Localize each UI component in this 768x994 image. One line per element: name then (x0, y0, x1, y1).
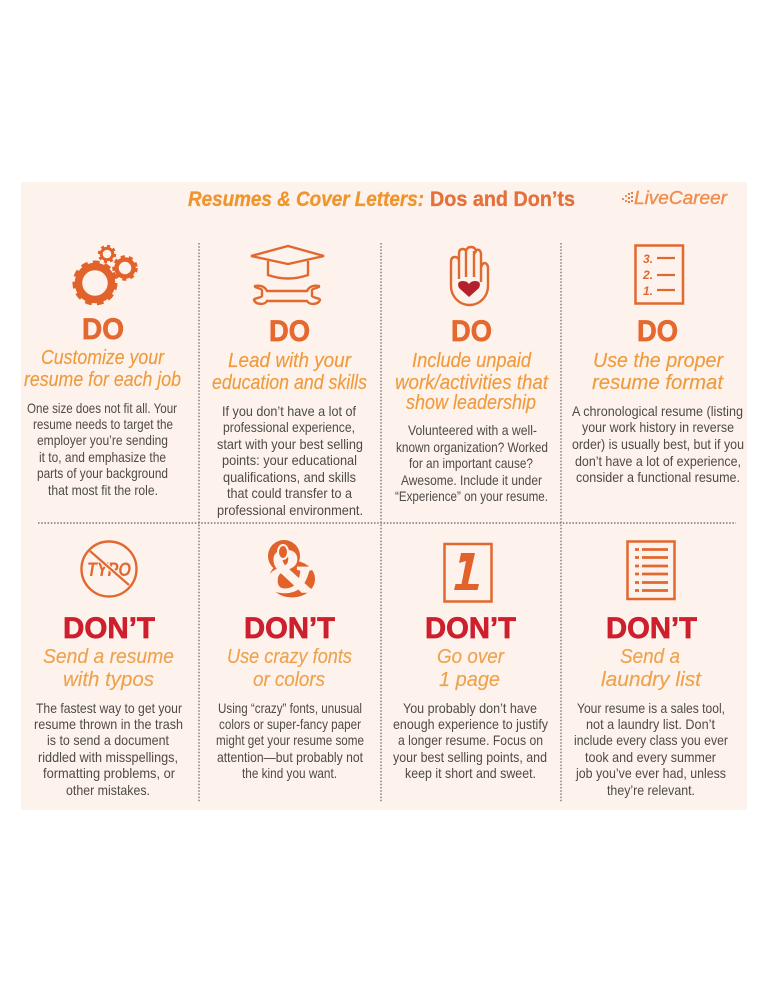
text block: Using “crazy” fonts, unusual (218, 700, 362, 716)
text block: a longer resume. Focus on (398, 732, 543, 748)
icon: numbered list: 2. (642, 268, 653, 282)
text block (34, 700, 183, 798)
text block: The fastest way to get your (36, 700, 182, 716)
text block: attention—but probably not (217, 749, 363, 765)
icon: laundry list (628, 542, 674, 599)
heading: Customize your (41, 347, 165, 369)
text block: You probably don’t have (403, 700, 537, 716)
panel: lead with education (212, 246, 367, 518)
heading: laundry list (601, 669, 702, 691)
panel: background (21, 182, 747, 810)
text block: other mistakes. (66, 782, 150, 798)
icon: numbered list: 1. (643, 284, 653, 298)
heading: education and skills (212, 372, 367, 394)
heading: Go over (437, 646, 505, 668)
text block: resume thrown in the trash (34, 716, 183, 732)
panel: crazy fonts (216, 538, 364, 781)
text block (27, 400, 177, 498)
text block: they’re relevant. (607, 782, 695, 798)
panel: resume format (572, 246, 744, 485)
text block: took and every summer (585, 749, 716, 765)
text block: don’t have a lot of experience, (575, 453, 741, 469)
text block: your work history in reverse (582, 419, 734, 435)
panel: unpaid work (395, 247, 549, 504)
text block: is to send a document (47, 732, 169, 748)
heading (601, 646, 702, 691)
title: Resumes & Cover Letters: (188, 188, 424, 211)
heading: Lead with your (228, 350, 352, 372)
text block: start with your best selling (217, 436, 363, 452)
heading: resume format (592, 372, 724, 394)
heading: show leadership (406, 392, 536, 414)
label: DO: DO (269, 315, 310, 348)
label: DO: DO (637, 315, 678, 348)
panel: customize your resume (24, 246, 181, 498)
heading: with typos (63, 669, 154, 691)
text block (572, 403, 744, 485)
heading: Use crazy fonts (227, 646, 352, 668)
heading (212, 350, 367, 394)
panel: laundry list (574, 542, 728, 798)
text block (574, 700, 728, 798)
text block: If you don’t have a lot of (222, 403, 356, 419)
text block: Volunteered with a well- (408, 422, 537, 438)
heading: resume for each job (24, 369, 181, 391)
text block: Awesome. Include it under (401, 472, 542, 488)
text block: that most fit the role. (48, 482, 158, 498)
icon: numbered list: 3. (643, 252, 653, 266)
text block (395, 422, 548, 504)
heading: Use the proper (593, 350, 724, 372)
text block: that could transfer to a (227, 485, 352, 501)
text block: include every class you ever (574, 732, 728, 748)
icon: graduation cap and wrench (251, 246, 324, 304)
icon: no typos: TYPO (87, 560, 131, 581)
text block: it to, and emphasize the (39, 449, 166, 465)
text block: job you’ve ever had, unless (575, 765, 726, 781)
logo: LiveCareer: LiveCareer (634, 188, 728, 208)
text block: order) is usually best, but if you (572, 436, 744, 452)
text block: resume needs to target the (33, 416, 173, 432)
heading: or colors (253, 669, 325, 691)
heading (592, 350, 724, 394)
label: DO: DO (451, 315, 492, 348)
text block: enough experience to justify (393, 716, 548, 732)
text block: might get your resume some (216, 732, 364, 748)
panel: one page (393, 544, 548, 781)
icon: no typos (82, 542, 136, 596)
text block (217, 403, 363, 518)
label: DON'T: DON’T (63, 612, 155, 645)
heading: work/activities that (395, 372, 549, 394)
text block: “Experience” on your resume. (395, 488, 548, 504)
text block: known organization? Worked (396, 439, 548, 455)
heading (43, 646, 174, 691)
icon: hand with heart (451, 247, 488, 305)
heading (24, 347, 181, 391)
heading: Include unpaid (412, 350, 532, 372)
text block: Your resume is a sales tool, (577, 700, 725, 716)
text block: colors or super-fancy paper (219, 716, 361, 732)
label: DON'T: DON’T (606, 612, 697, 645)
panel: typos (34, 542, 183, 798)
text block (216, 700, 364, 781)
text block: keep it short and sweet. (405, 765, 536, 781)
text block: consider a functional resume. (576, 469, 740, 485)
text block (393, 700, 548, 781)
text block: qualifications, and skills (223, 469, 356, 485)
text block: employer you’re sending (37, 432, 168, 448)
text block: the kind you want. (242, 765, 337, 781)
heading (227, 646, 352, 691)
text block: points: your educational (222, 452, 357, 468)
label: DON'T: DON’T (425, 612, 516, 645)
text block: professional environment. (217, 502, 363, 518)
text block: riddled with misspellings, (38, 749, 178, 765)
heading: 1 page (439, 669, 500, 691)
text block: for an important cause? (409, 455, 533, 471)
title: Dos and Don’ts (430, 188, 575, 211)
label: DO: DO (82, 313, 124, 346)
label: DON'T: DON’T (244, 612, 335, 645)
heading: Send a (620, 646, 680, 668)
text block: parts of your background (37, 465, 168, 481)
heading: Send a resume (43, 646, 174, 668)
text block: A chronological resume (listing (572, 403, 743, 419)
title (188, 188, 575, 211)
text block: not a laundry list. Don’t (586, 716, 715, 732)
icon: page number 1 (444, 544, 492, 602)
icon: gears (75, 246, 136, 303)
text block: professional experience, (223, 419, 355, 435)
heading (437, 646, 505, 691)
heading (395, 350, 549, 414)
text block: formatting problems, or (43, 765, 175, 781)
text block: One size does not fit all. Your (27, 400, 177, 416)
icon: numbered list (636, 246, 683, 304)
text block: your best selling points, and (393, 749, 547, 765)
icon: ampersand: & (265, 538, 317, 606)
